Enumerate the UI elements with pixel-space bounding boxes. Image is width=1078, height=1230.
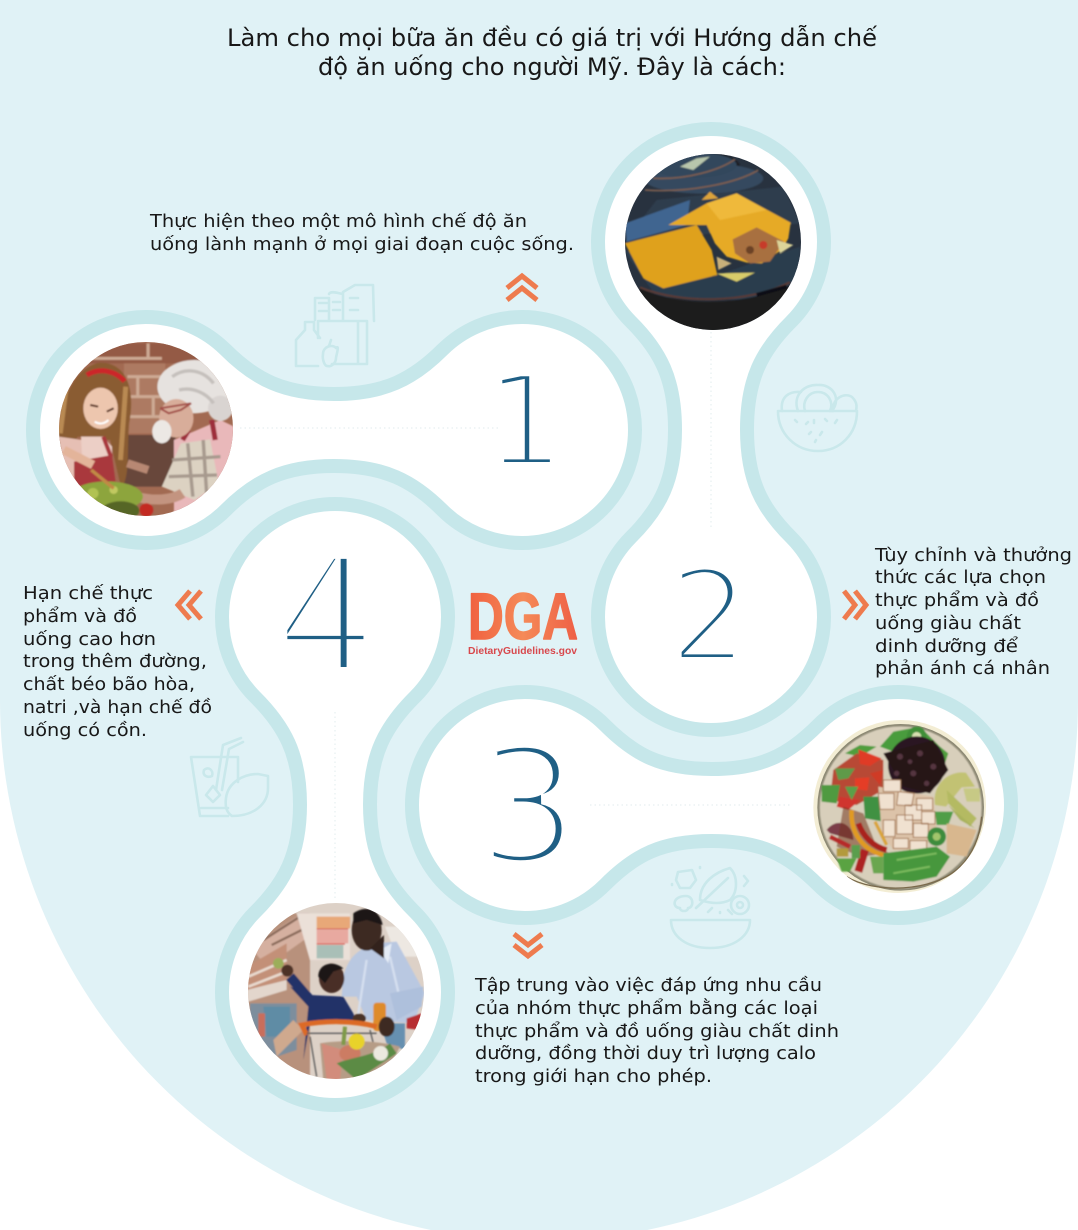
photo: girl and grandmother cooking (55, 340, 241, 520)
text block: step 2: uống giàu chất (875, 613, 1021, 634)
panel: step 2 capsule (598, 129, 824, 730)
text block: step 2: Tùy chỉnh và thưởng (874, 545, 1072, 566)
text block: step 4: chất béo bão hòa, (23, 674, 195, 695)
numeral: 4: 4 (274, 523, 378, 711)
text block: step 1: uống lành mạnh ở mọi giai đoạn cuộc sống. (150, 234, 574, 255)
text block: step 4: Hạn chế thực (23, 583, 153, 604)
text block: step 2: phản ánh cá nhân (875, 658, 1050, 679)
title (227, 23, 877, 81)
text block: step 2: thức các lựa chọn (875, 567, 1046, 588)
text block: step 2: dinh dưỡng để (875, 636, 1018, 657)
text block: step 3: Tập trung vào việc đáp ứng nhu cầu (474, 975, 822, 996)
panel: step 1 capsule (33, 317, 635, 543)
icon: salad bowl (671, 867, 750, 948)
text block: step 3: trong giới hạn cho phép. (475, 1066, 712, 1087)
text block: step 4: natri ,và hạn chế đồ (23, 697, 212, 718)
text block: step 4: trong thêm đường, (23, 651, 207, 672)
text block: step 4: phẩm và đồ (23, 606, 137, 627)
numeral: 2: 2 (668, 543, 750, 692)
logo: DGA DietaryGuidelines.gov: DGA (468, 579, 578, 653)
photo: burrito bowl (813, 720, 988, 895)
text block: step 4: uống cao hơn (23, 629, 156, 650)
text block: step 1: Thực hiện theo một mô hình chế độ ăn (149, 211, 527, 232)
text block: step 4: uống có cồn. (23, 720, 147, 741)
numeral: 3: 3 (476, 714, 580, 902)
panel: step 4 capsule (222, 504, 448, 1105)
icon: drink and lemon (191, 738, 268, 816)
text block: step 4 (23, 583, 212, 741)
text block: step 3: của nhóm thực phẩm bằng các loại (475, 998, 818, 1019)
text block: step 3: dưỡng, đồng thời duy trì lượng calo (475, 1043, 816, 1064)
icon: bowl with fruit (778, 385, 857, 451)
arrow: left (178, 591, 201, 619)
arrow: up (507, 276, 537, 300)
text block: step 3: thực phẩm và đồ uống giàu chất dinh (475, 1021, 839, 1042)
numeral: 1: 1 (484, 348, 566, 497)
title: độ ăn uống cho người Mỹ. Đây là cách: (318, 53, 786, 81)
arrow: down (514, 934, 542, 956)
arrow: right (844, 591, 866, 619)
text block: step 1 (149, 211, 574, 255)
photo: father and son shopping (243, 900, 427, 1082)
photo: tamales on blue plate (620, 150, 806, 334)
title: Làm cho mọi bữa ăn đều có giá trị với Hướng dẫn chế (227, 23, 877, 52)
text block: step 2 (874, 545, 1072, 679)
text block: step 2: thực phẩm và đồ (875, 590, 1039, 611)
panel: step 3 capsule (412, 692, 1011, 918)
text block: step 3 (474, 975, 839, 1087)
icon: grocery bag (296, 285, 374, 366)
logo: DGA DietaryGuidelines.gov: DietaryGuidelines.gov (468, 646, 577, 657)
